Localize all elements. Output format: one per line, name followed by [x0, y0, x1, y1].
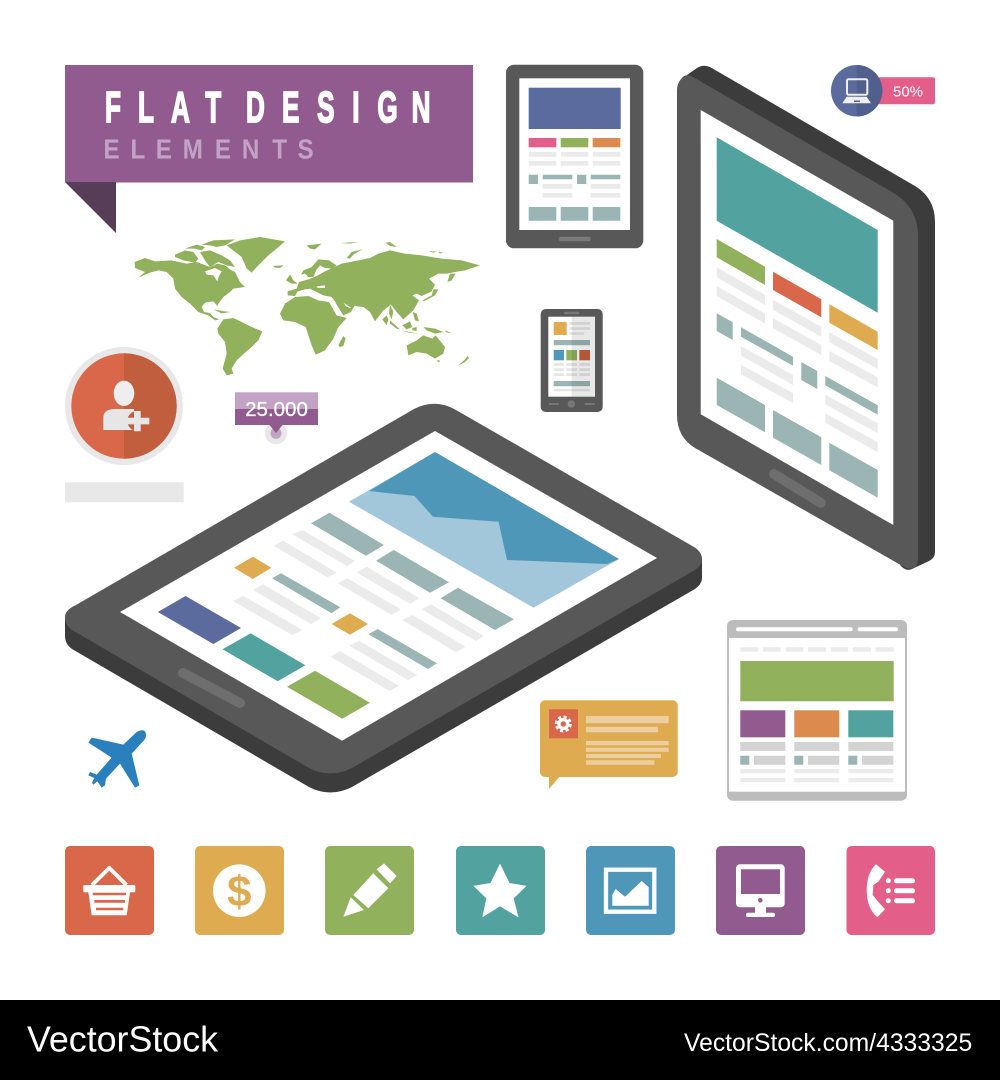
- title banner: [65, 65, 473, 233]
- user add avatar: [65, 347, 183, 465]
- placeholder bar: [65, 482, 184, 502]
- label: 50%: 50%: [893, 84, 923, 101]
- world map: [135, 237, 480, 375]
- icon: laptop: [842, 79, 871, 103]
- label: dollar sign: $: [227, 868, 252, 916]
- subheading: elements: ELEMENTS: [104, 133, 314, 165]
- icon tile: star: [456, 846, 545, 935]
- icon tile: shopping basket: [65, 846, 154, 935]
- icon: gear: [556, 717, 570, 731]
- large portrait isometric tablet: [677, 66, 935, 570]
- heading: flat design: FLAT DESIGN: [105, 83, 430, 132]
- image reference: VectorStock.com/4333325: [684, 1030, 972, 1057]
- icon: airplane: [88, 730, 146, 788]
- badge: laptop 50%: [831, 65, 935, 116]
- large landscape isometric tablet: [65, 404, 702, 792]
- browser window: [727, 620, 907, 801]
- map pin callout: 25.000: [235, 392, 318, 444]
- icon tile: monitor: [716, 846, 805, 935]
- label: 25.000: 25.000: [245, 398, 308, 421]
- footer watermark bar: [0, 1000, 1000, 1080]
- smartphone: [541, 309, 603, 412]
- icon tile: picture: [586, 846, 675, 935]
- icon: person with plus: [103, 381, 149, 431]
- brand wordmark: VectorStock: [27, 1020, 218, 1060]
- small upright tablet: [506, 65, 643, 248]
- icon tile: telephone list: [846, 846, 935, 935]
- chat bubble card: [540, 700, 678, 789]
- icon tile: dollar coin: [195, 846, 284, 935]
- icon tile: pencil: [325, 846, 414, 935]
